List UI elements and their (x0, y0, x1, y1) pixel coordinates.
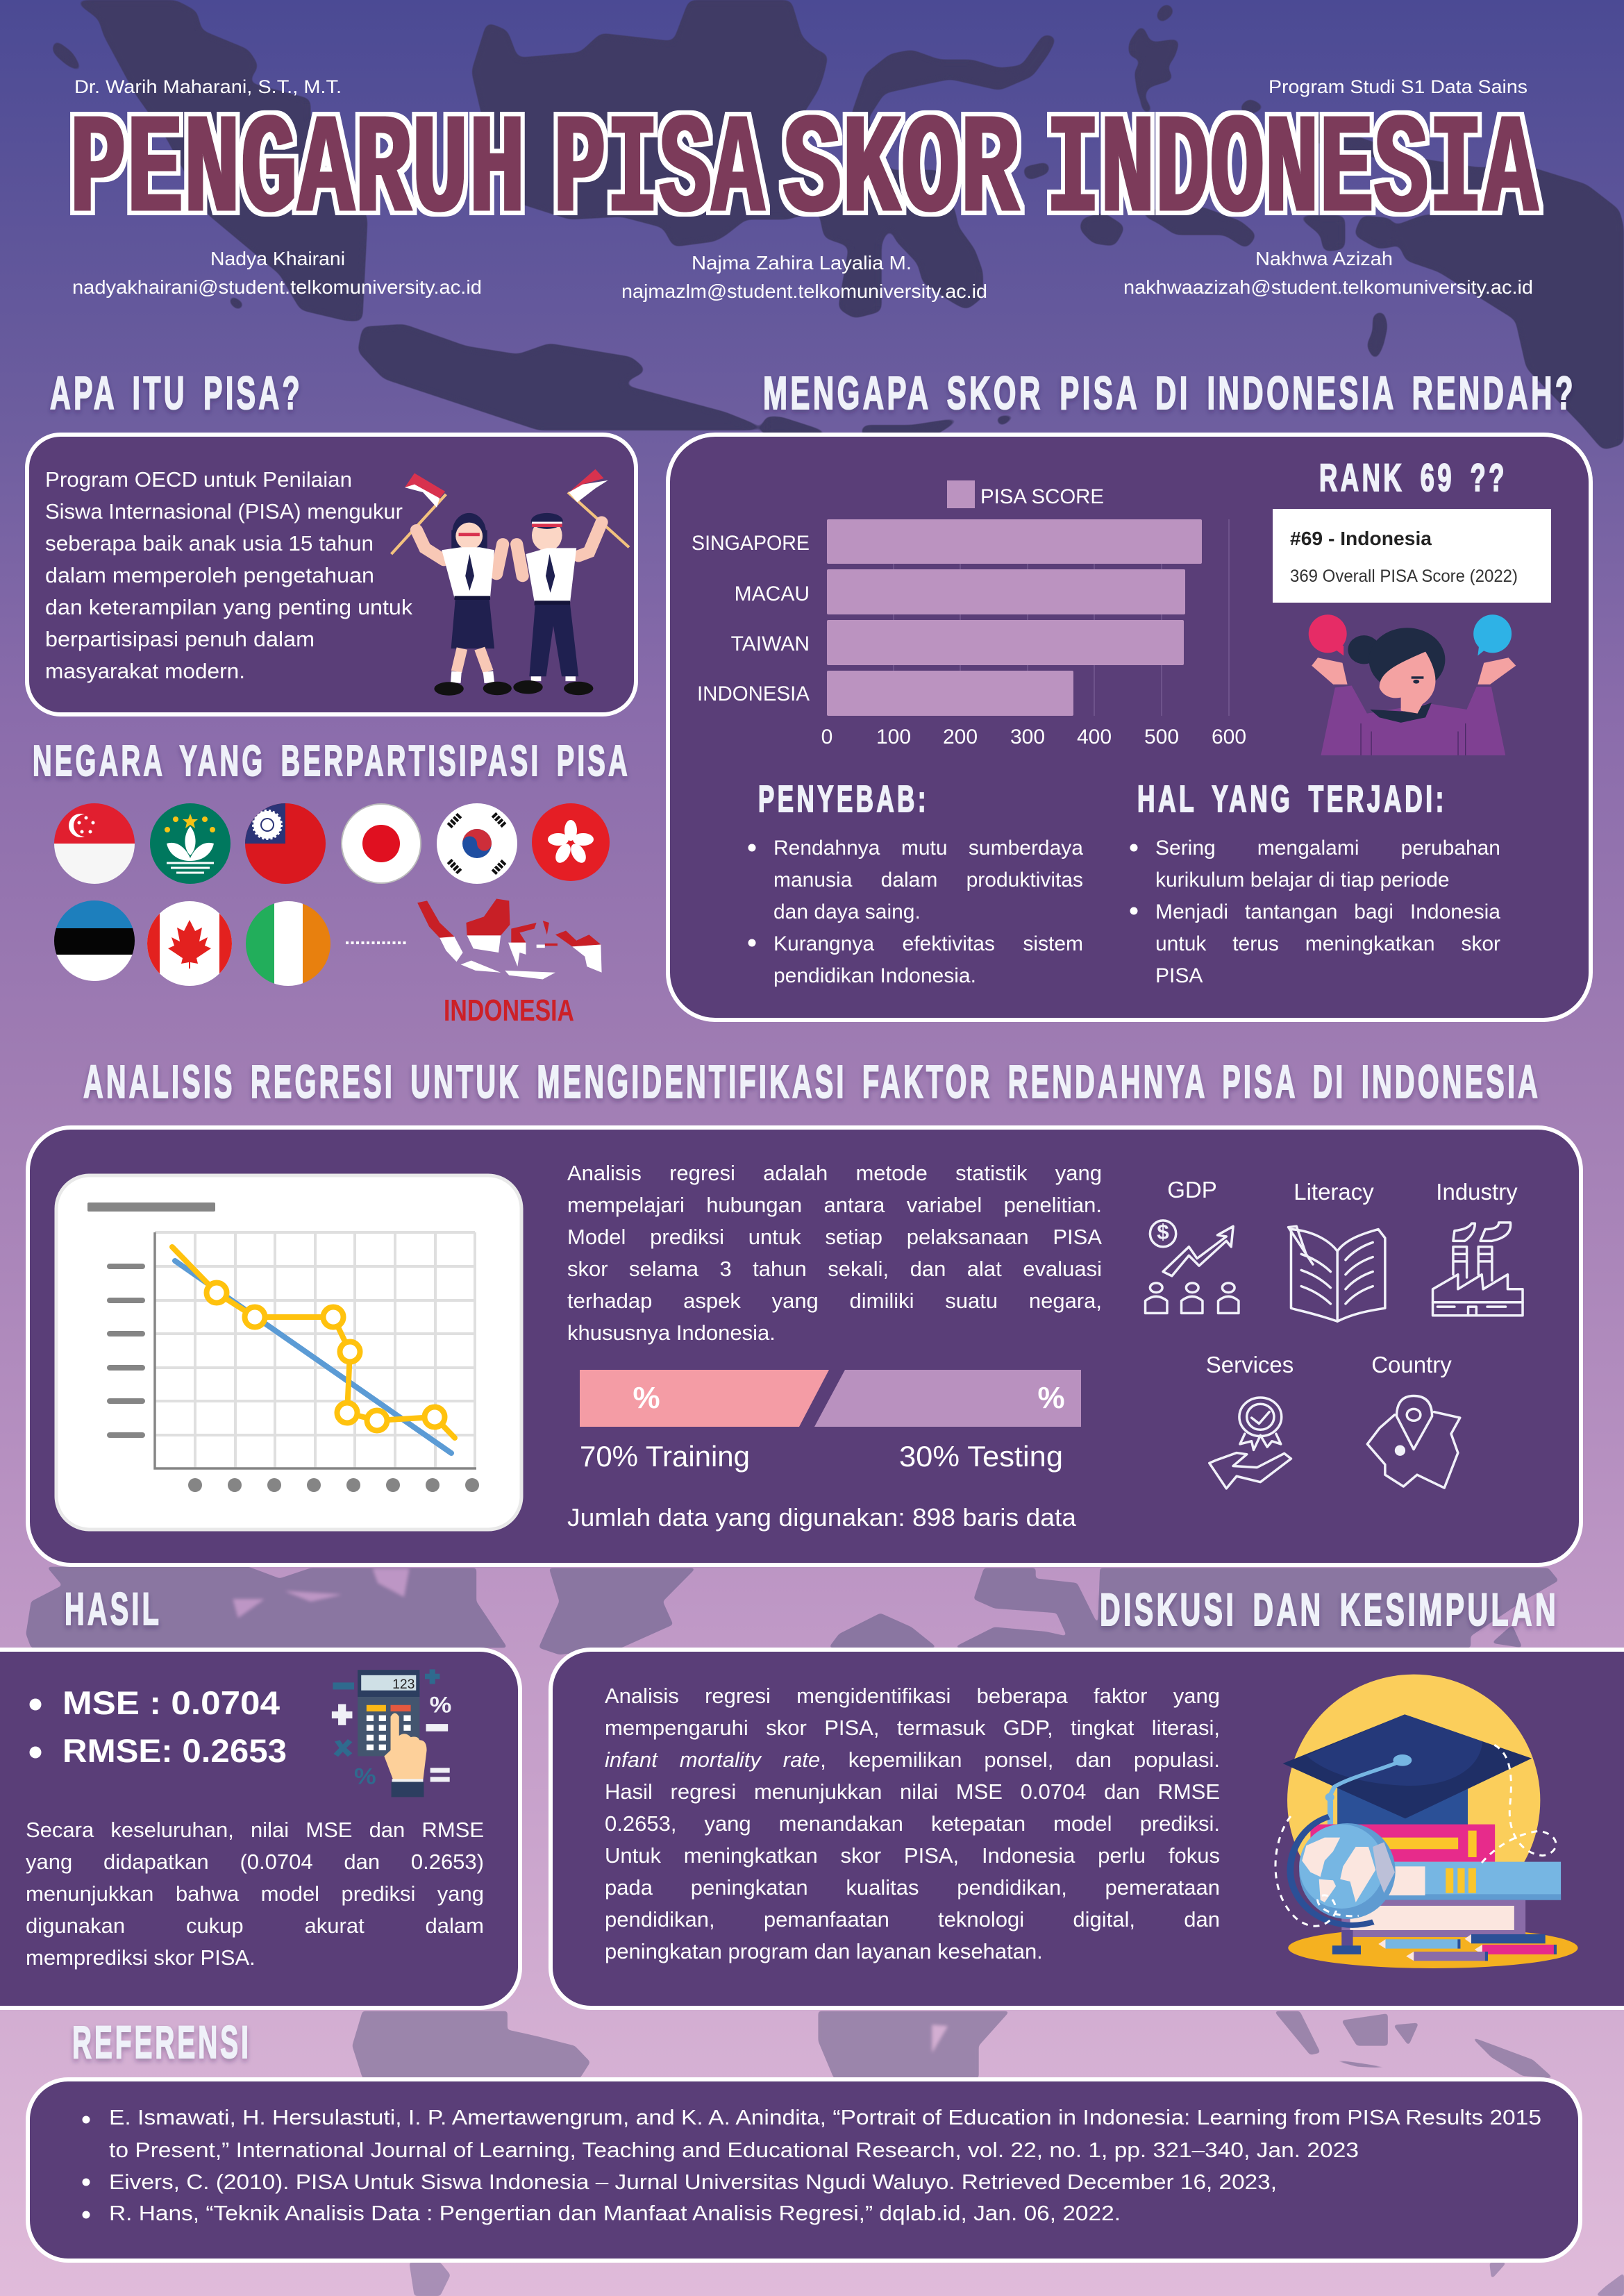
chart legend: PISA SCORE (980, 485, 1104, 508)
background map: world silhouette middle strip (26, 1567, 1559, 1654)
header: supervisor name: Dr. Warih Maharani, S.T., M.T. (74, 76, 342, 97)
label: 70% training: 70% Training (580, 1440, 750, 1473)
hasil explanation text: yang didapatkan (0.0704 dan 0.2653) (26, 1850, 484, 1874)
factor labels: Services (1206, 1352, 1294, 1377)
discussion text: pendidikan, pemanfaatan teknologi digital, dan (605, 1907, 1220, 1932)
icon: Indonesia map red and white (417, 899, 602, 979)
description text: masyarakat modern. (45, 659, 245, 683)
illustration: confused woman (1309, 614, 1516, 755)
icon: services hand and badge (1209, 1398, 1291, 1489)
description text: seberapa baik anak usia 15 tahun (45, 531, 374, 555)
icon: GDP: $ (1157, 1220, 1169, 1243)
discussion text: Hasil regresi menunjukkan nilai MSE 0.0704 dan RMSE (605, 1779, 1220, 1804)
category labels: SINGAPORE (692, 532, 810, 555)
axis labels: 600 (1212, 726, 1246, 748)
description text (45, 467, 413, 683)
list: penyebab (748, 832, 1083, 996)
author 3 (1123, 248, 1533, 298)
regression description text: skor selama 3 tahun sekali, dan alat evaluasi (567, 1257, 1102, 1281)
axis labels (821, 726, 1246, 748)
icon: GDP (1146, 1220, 1239, 1313)
icon: calculator with hand (332, 1669, 451, 1797)
list: penyebab: dan daya saing. (773, 900, 921, 923)
title: SKOR (782, 92, 1019, 253)
bars (827, 519, 1202, 716)
icon: industry factory (1433, 1223, 1523, 1316)
category labels: MACAU (735, 583, 810, 605)
hasil explanation text: Secara keseluruhan, nilai MSE dan RMSE (26, 1818, 484, 1842)
description text: dalam memperoleh pengetahuan (45, 563, 374, 587)
chart legend (947, 480, 1104, 508)
hasil explanation text (26, 1814, 484, 1977)
panel: referensi (28, 2079, 1580, 2261)
author 2: najmazlm@student.telkomuniversity.ac.id (621, 280, 987, 302)
list: hal yang terjadi: Menjadi tantangan bagi Indonesia (1155, 900, 1500, 923)
regression description text: Model prediksi untuk setiap pelaksanaan PISA (567, 1225, 1102, 1249)
icon: literacy book (1289, 1226, 1385, 1321)
factor labels (1167, 1177, 1518, 1377)
heading: hasil: HASIL (65, 1583, 162, 1634)
icon: calculator with hand: % (354, 1764, 376, 1789)
author 2 (621, 252, 987, 302)
header: study program: Program Studi S1 Data Sains (1269, 76, 1527, 97)
description text: Program OECD untuk Penilaian (45, 467, 352, 492)
factor labels: Industry (1436, 1179, 1518, 1205)
references list: Eivers, C. (2010). PISA Untuk Siswa Indonesia – Jurnal Universitas Ngudi Waluyo. Retrieved December 16, 2023, (109, 2170, 1277, 2194)
discussion text: 0.2653, yang menandakan ketepatan model prediksi. (605, 1811, 1220, 1836)
axis labels: 200 (943, 726, 978, 748)
list: penyebab: manusia dalam produktivitas (773, 869, 1083, 891)
author 3: Nakhwa Azizah (1255, 248, 1393, 269)
references list: to Present,” International Journal of Learning, Teaching and Educational Research, vol. 22, no. 1, pp. 321–340, Jan. 2023 (109, 2138, 1359, 2162)
flag: Canada (147, 901, 232, 986)
flag: Taiwan (245, 803, 326, 884)
flag: Hong Kong (532, 803, 610, 881)
regression description text: terhadap aspek yang dimiliki suatu negara, (567, 1289, 1102, 1313)
category labels (692, 532, 810, 705)
background map: Indonesia silhouette top (52, 0, 1624, 451)
discussion text: Untuk meningkatkan skor PISA, Indonesia perlu fokus (605, 1843, 1220, 1868)
icon: country pin map (1367, 1396, 1460, 1488)
heading: apa itu PISA: APA ITU PISA? (50, 367, 303, 419)
discussion text: mempengaruhi skor PISA, termasuk GDP, tingkat literasi, (605, 1716, 1220, 1740)
factor labels: Literacy (1294, 1179, 1374, 1205)
panel: diskusi dan kesimpulan (551, 1650, 1624, 2008)
heading: penyebab: PENYEBAB: (758, 778, 929, 820)
label: Indonesia: INDONESIA (444, 994, 574, 1028)
metrics list: MSE : 0.0704 (62, 1684, 280, 1721)
background map: world silhouette lower strip (352, 2011, 1624, 2296)
list: hal yang terjadi: kurikulum belajar di tiap periode (1155, 869, 1450, 891)
hasil explanation text: memprediksi skor PISA. (26, 1945, 256, 1970)
chart card: regression line (56, 1175, 521, 1530)
references list (82, 2105, 1541, 2225)
heading: hal yang terjadi: HAL YANG TERJADI: (1137, 778, 1447, 820)
icon: calculator with hand: % (430, 1693, 451, 1718)
panel: hasil (0, 1650, 520, 2008)
factor labels: Country (1371, 1352, 1452, 1377)
axis labels: 100 (876, 726, 911, 748)
dotted connector (346, 941, 408, 944)
rank card (1273, 509, 1551, 603)
description text: berpartisipasi penuh dalam (45, 627, 315, 651)
flag: Ireland (246, 901, 331, 986)
train test split bar (580, 1370, 1081, 1427)
train test split bar: % (633, 1381, 660, 1415)
list: penyebab: Kurangnya efektivitas sistem (773, 932, 1083, 955)
references list: E. Ismawati, H. Hersulastuti, I. P. Amertawengrum, and K. A. Anindita, “Portrait of Education in Indonesia: Learning from PISA Results 2015 (109, 2105, 1541, 2129)
regression description text (567, 1157, 1102, 1355)
list: hal yang terjadi: Sering mengalami perubahan (1155, 837, 1500, 860)
regression description text: mempelajari hubungan antara variabel penelitian. (567, 1193, 1102, 1217)
list: hal yang terjadi (1130, 832, 1500, 996)
hasil explanation text: digunakan cukup akurat dalam (26, 1913, 484, 1938)
discussion text (605, 1680, 1220, 1972)
regression description text: Analisis regresi adalah metode statistik yang (567, 1161, 1102, 1185)
panel: mengapa skor rendah (668, 435, 1591, 1020)
category labels: TAIWAN (731, 632, 810, 655)
discussion text: peningkatan program dan layanan kesehatan. (605, 1939, 1043, 1963)
flag: Singapore (54, 803, 135, 884)
discussion text: Analisis regresi mengidentifikasi beberapa faktor yang (605, 1684, 1220, 1708)
rank card: #69 - Indonesia (1290, 528, 1432, 549)
axis labels: 0 (821, 726, 832, 748)
flag: Macau (150, 803, 231, 884)
list: hal yang terjadi: untuk terus meningkatkan skor (1155, 932, 1500, 955)
panel: analisis regresi (28, 1128, 1581, 1565)
title (69, 92, 1539, 253)
references list: R. Hans, “Teknik Analisis Data : Pengertian dan Manfaat Analisis Regresi,” dqlab.id, Jan. 06, 2022. (109, 2201, 1121, 2225)
list: hal yang terjadi: PISA (1155, 964, 1203, 987)
panel: apa itu PISA (27, 435, 636, 714)
category labels: INDONESIA (697, 682, 810, 705)
label: 30% testing: 30% Testing (899, 1440, 1063, 1473)
axis labels: 500 (1144, 726, 1179, 748)
author 3: nakhwaazizah@student.telkomuniversity.ac.id (1123, 276, 1533, 298)
description text: dan keterampilan yang penting untuk (45, 595, 413, 619)
regression description text: khususnya Indonesia. (567, 1321, 776, 1345)
discussion text: infant mortality rate, kepemilikan ponsel, dan populasi. (605, 1748, 1220, 1772)
axis labels: 400 (1077, 726, 1112, 748)
flags of participating countries (54, 803, 610, 1028)
list: penyebab: pendidikan Indonesia. (773, 964, 976, 987)
train test split bar: % (1037, 1381, 1065, 1415)
heading: rank 69: RANK 69 ?? (1319, 455, 1507, 499)
heading: referensi: REFERENSI (72, 2016, 251, 2068)
title: PENGARUH (69, 92, 526, 253)
bar chart: PISA score (692, 480, 1246, 748)
heading: negara yang berpartisipasi: NEGARA YANG BERPARTISIPASI PISA (33, 737, 630, 785)
title: PISA (553, 92, 765, 253)
author 1: Nadya Khairani (210, 248, 345, 269)
data count: Jumlah data yang digunakan: 898 baris data (567, 1503, 1077, 1532)
factor labels: GDP (1167, 1177, 1217, 1203)
description text: Siswa Internasional (PISA) mengukur (45, 499, 403, 523)
icon: calculator with hand: 123 (392, 1677, 415, 1692)
illustration: students with flags (392, 469, 629, 696)
metrics list: RMSE: 0.2653 (62, 1732, 287, 1769)
author 1 (72, 248, 482, 298)
flag: Estonia (54, 900, 135, 982)
metrics list (29, 1684, 287, 1769)
author 2: Najma Zahira Layalia M. (692, 252, 912, 274)
flag: Japan (342, 804, 421, 883)
flag: South Korea (437, 803, 517, 884)
author 1: nadyakhairani@student.telkomuniversity.ac.id (72, 276, 482, 298)
hasil explanation text: menunjukkan bahwa model prediksi yang (26, 1882, 484, 1906)
illustration: graduation cap, books and globe (1265, 1675, 1578, 1968)
rank card: 369 Overall PISA Score (2022) (1290, 567, 1518, 586)
list: penyebab: Rendahnya mutu sumberdaya (773, 837, 1083, 860)
discussion text: pada peningkatan kualitas pendidikan, pemerataan (605, 1875, 1220, 1900)
axis labels: 300 (1010, 726, 1045, 748)
